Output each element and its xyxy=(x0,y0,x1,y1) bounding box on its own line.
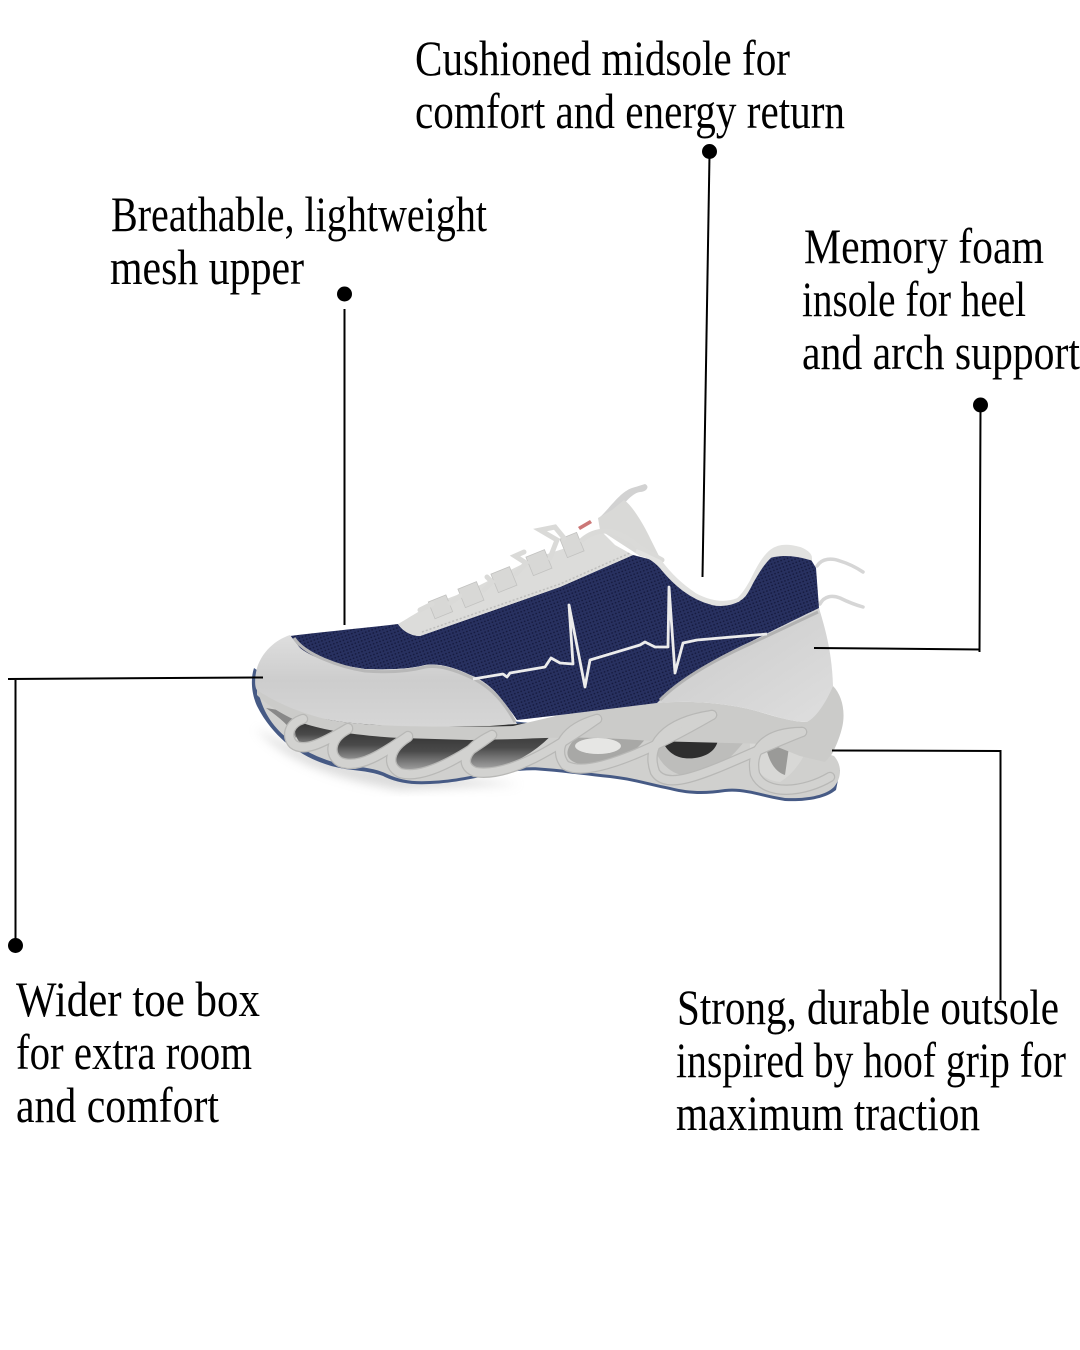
callout: cushioned midsole xyxy=(415,30,845,577)
sole gray base xyxy=(258,690,840,798)
text: outsole xyxy=(676,979,1066,1141)
tongue pull tab xyxy=(600,484,647,520)
midsole pods xyxy=(266,708,812,782)
midsole band xyxy=(257,686,844,762)
heel pull loops xyxy=(817,559,863,607)
toe cap overlay xyxy=(255,635,517,726)
text: toe box: for extra room xyxy=(16,1024,252,1080)
leader: memory foam xyxy=(814,398,988,652)
text: toe box: Wider toe box xyxy=(16,971,260,1027)
outsole blue edge xyxy=(252,668,840,801)
text: mesh upper: mesh upper xyxy=(110,239,304,295)
heel counter stitching xyxy=(660,612,818,700)
text: outsole: maximum traction xyxy=(676,1085,980,1141)
leader: outsole xyxy=(832,750,1000,1000)
leader: toe box xyxy=(8,678,263,953)
midsole flame waves xyxy=(289,715,830,790)
text: mesh upper: Breathable, lightweight xyxy=(111,186,487,242)
text: memory foam: insole for heel xyxy=(802,271,1026,327)
tongue red label xyxy=(578,520,592,530)
leader: mesh upper xyxy=(337,286,352,625)
callout: memory foam xyxy=(802,218,1080,652)
callout: mesh upper xyxy=(110,186,487,625)
text: toe box: and comfort xyxy=(16,1077,219,1133)
leader: cushioned midsole xyxy=(702,144,717,577)
eyestay stitching xyxy=(422,553,630,632)
callout: outsole xyxy=(676,750,1066,1141)
heartbeat line xyxy=(473,587,767,687)
laces xyxy=(428,532,584,619)
lace loops xyxy=(420,527,662,610)
lace eyestay panel xyxy=(398,530,633,636)
text: cushioned midsole: comfort and energy return xyxy=(415,83,845,139)
heel counter overlay xyxy=(657,608,833,722)
text: toe box xyxy=(16,971,260,1133)
collar lining xyxy=(636,547,810,604)
shoe illustration xyxy=(252,484,863,801)
navy mesh upper xyxy=(290,554,819,720)
callout: toe box xyxy=(8,678,263,1133)
text: cushioned midsole: Cushioned midsole for xyxy=(415,30,790,86)
ground shadow xyxy=(256,728,520,790)
tongue xyxy=(598,500,662,562)
text: cushioned midsole xyxy=(415,30,845,139)
toe cap stitching xyxy=(294,638,515,722)
text: memory foam xyxy=(802,218,1080,380)
text: mesh upper xyxy=(110,186,487,295)
